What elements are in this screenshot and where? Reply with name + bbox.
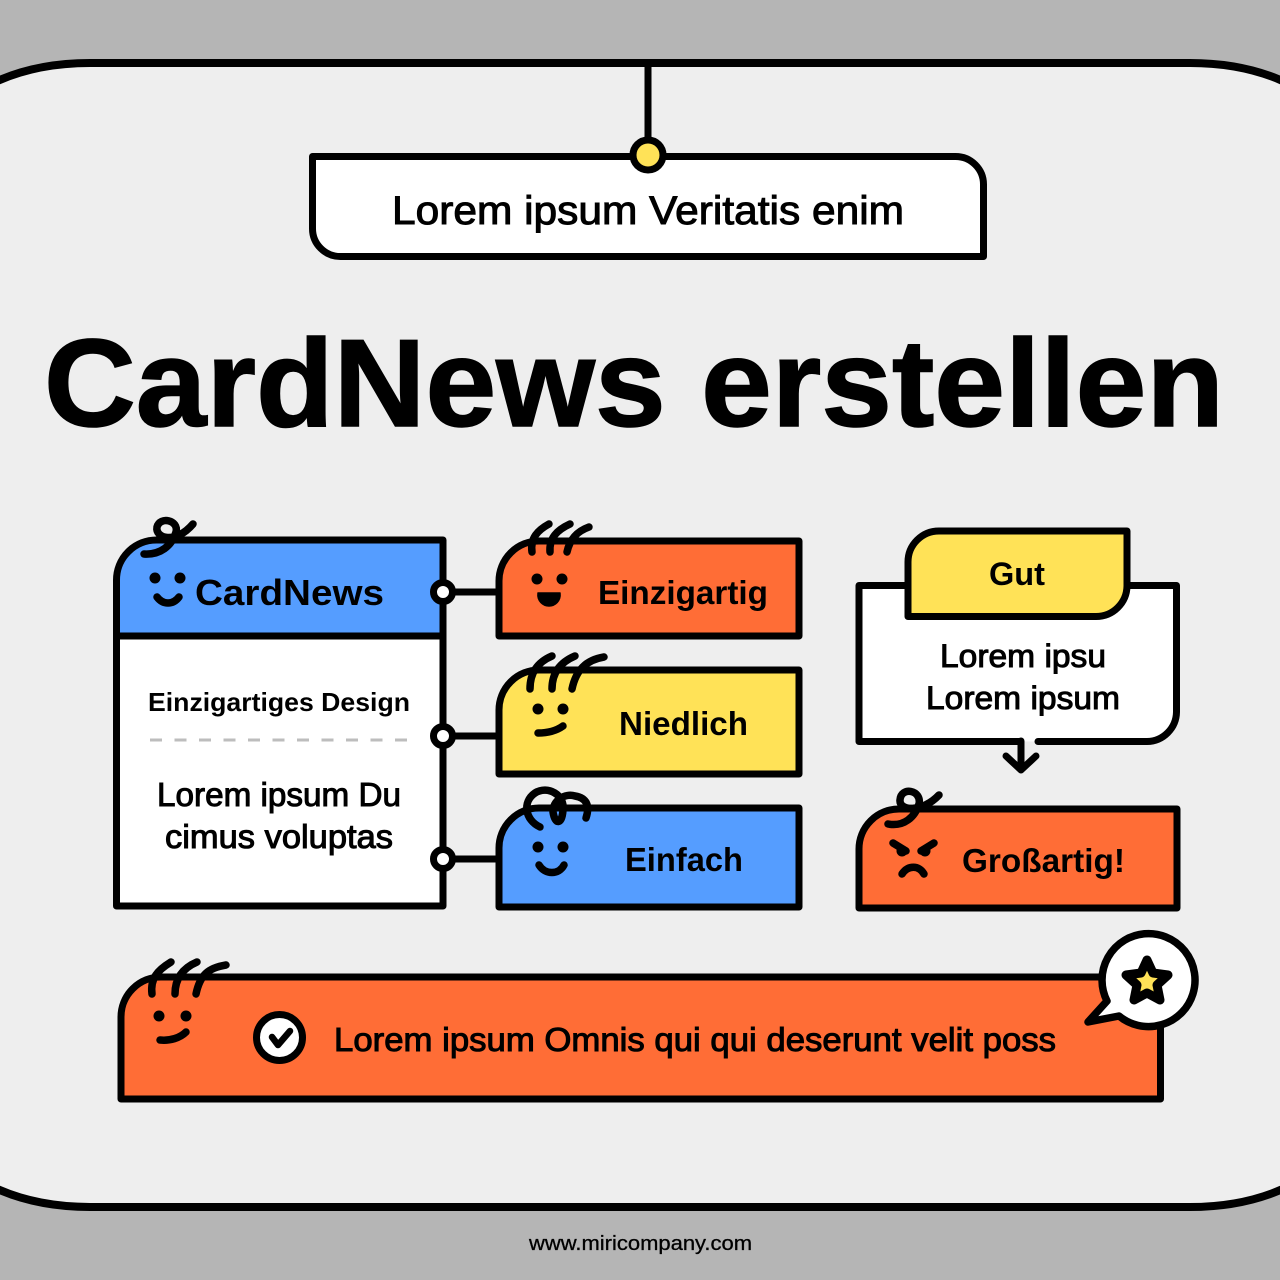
arrow <box>1006 741 1036 770</box>
card body text: cimus voluptas <box>165 818 393 855</box>
connector line <box>644 63 652 143</box>
box <box>121 977 1160 1099</box>
label text: Lorem ipsum Veritatis enim <box>392 189 904 233</box>
icon: smiling face <box>532 842 568 872</box>
title: CardNews erstellen <box>44 315 1224 453</box>
icon: angry face <box>893 843 934 874</box>
panel: Niedlich <box>499 656 799 774</box>
panel: Großartig <box>859 791 1177 908</box>
connector dot <box>633 140 663 170</box>
card header <box>116 540 443 636</box>
card text <box>926 638 1120 716</box>
box <box>499 541 799 636</box>
icon: hair <box>530 656 604 689</box>
icon: smirking face <box>532 704 568 733</box>
box <box>499 670 799 774</box>
panel: CardNews card <box>116 521 443 906</box>
icon: hair <box>532 524 589 552</box>
text: Großartig! <box>962 842 1125 879</box>
icon: star speech bubble <box>1088 934 1195 1027</box>
icon: laughing face <box>532 574 568 606</box>
top label <box>312 63 984 257</box>
card text: Lorem ipsum <box>926 680 1120 716</box>
yellow tab <box>908 531 1127 616</box>
label box <box>312 156 984 257</box>
panel: bottom banner <box>121 934 1195 1099</box>
text: Niedlich <box>619 705 748 742</box>
footer url: www.miricompany.com <box>528 1233 752 1255</box>
icon: smirking face <box>154 1010 192 1040</box>
card body text: Lorem ipsum Du <box>157 776 401 813</box>
panel: Einzigartig <box>499 524 799 636</box>
card body <box>116 636 443 906</box>
icon: check mark <box>256 1014 302 1060</box>
banner text: Lorem ipsum Omnis qui qui deserunt velit poss <box>334 1021 1056 1058</box>
card text: Lorem ipsu <box>940 638 1106 674</box>
header text: CardNews <box>195 572 384 613</box>
card fill <box>859 586 1176 742</box>
connectors <box>434 582 499 868</box>
card subheading: Einzigartiges Design <box>148 687 410 717</box>
box <box>859 809 1177 908</box>
icon: hair curl <box>144 521 193 554</box>
box <box>499 808 799 907</box>
icon: curly hair <box>527 790 588 827</box>
tab text: Gut <box>989 556 1045 592</box>
icon: hair curl <box>888 791 939 825</box>
text: Einzigartig <box>598 574 768 611</box>
text: Einfach <box>625 841 743 878</box>
panel: Gut speech card <box>859 531 1176 770</box>
panel: Einfach <box>499 790 799 907</box>
icon: smiling face <box>150 572 186 603</box>
card body text <box>157 776 401 855</box>
card outline <box>859 586 1176 742</box>
icon: hair <box>152 962 226 994</box>
